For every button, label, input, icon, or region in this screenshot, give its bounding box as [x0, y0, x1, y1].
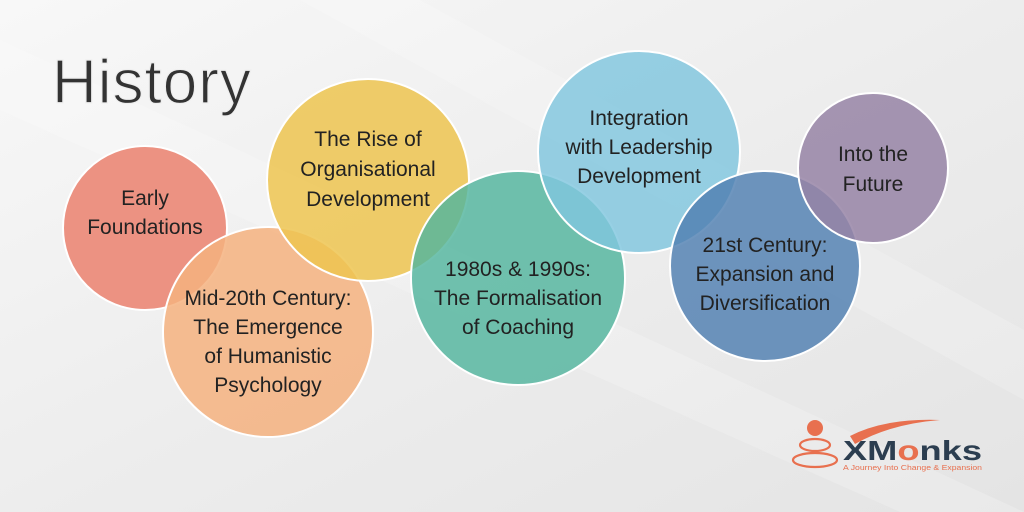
- circle: Early Foundations: Early: [121, 187, 169, 210]
- circle: 21st Century: Diversification: [700, 292, 830, 315]
- circle: Into the Future: [798, 93, 948, 243]
- circle: 1980s & 1990s: of Coaching: [462, 316, 574, 339]
- circle: Integration with Leadership Development: with Leadership: [564, 136, 713, 159]
- circle: Mid-20th Century: of Humanistic: [204, 345, 332, 368]
- circle: 1980s & 1990s: 1980s & 1990s:: [445, 258, 591, 281]
- logo: A Journey Into Change & Expansion: [843, 463, 982, 472]
- circle: Integration with Leadership Development: [538, 51, 740, 253]
- circle: Mid-20th Century: Mid-20th Century:: [185, 287, 351, 310]
- circle: Integration with Leadership Development: Development: [577, 165, 701, 188]
- circle: Early Foundations: Foundations: [87, 216, 203, 239]
- circle: The Rise of Organisational Development: Organisational: [300, 158, 436, 181]
- circle: 21st Century: [670, 171, 860, 361]
- logo: [793, 420, 982, 472]
- circle: 1980s & 1990s: [411, 171, 625, 385]
- circle: The Rise of Organisational Development: [267, 79, 469, 281]
- logo: XM onks: [843, 435, 982, 466]
- circle: 21st Century: 21st Century:: [703, 234, 827, 257]
- circle: Integration with Leadership Development: Integration: [589, 107, 689, 130]
- circle: 1980s & 1990s: The Formalisation: [434, 287, 602, 310]
- circle: The Rise of Organisational Development: Development: [306, 188, 430, 211]
- circle: Mid-20th Century: [163, 227, 373, 437]
- title: History: [52, 48, 252, 117]
- circle: Early Foundations: [63, 146, 227, 310]
- circle: The Rise of Organisational Development: The Rise of: [314, 128, 422, 151]
- circle: Into the Future: Future: [843, 173, 903, 196]
- circle: 21st Century: Expansion and: [696, 263, 834, 286]
- circle: Into the Future: Into the: [838, 143, 908, 166]
- circle: Mid-20th Century: The Emergence: [193, 316, 343, 339]
- icon: stacked stones: [793, 420, 837, 467]
- circle: Mid-20th Century: Psychology: [214, 374, 322, 397]
